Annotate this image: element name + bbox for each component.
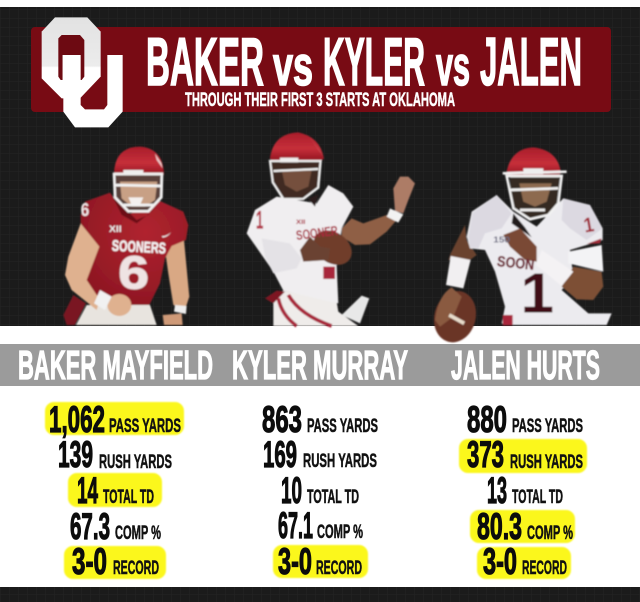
stats: Baker Mayfield: 14	[77, 470, 98, 511]
main title: vs	[436, 34, 470, 97]
stats: Kyler Murray: 3-0	[278, 541, 312, 582]
main title: KYLER	[323, 24, 425, 100]
dark header panel	[0, 7, 640, 326]
main title	[146, 24, 582, 100]
icon: OU logo	[42, 17, 123, 127]
stats: Jalen Hurts: 80.3	[477, 506, 522, 547]
stats: Baker Mayfield: RECORD	[113, 558, 159, 579]
player: Kyler Murray: XII	[296, 219, 305, 226]
stats: Jalen Hurts: PASS YARDS	[512, 416, 583, 437]
name: Baker Mayfield: BAKER MAYFIELD	[18, 342, 213, 388]
player: Baker Mayfield	[63, 147, 189, 325]
player: Jalen Hurts: SOON	[496, 254, 535, 274]
stats: Jalen Hurts: RUSH YARDS	[510, 452, 583, 473]
stats: Jalen Hurts: COMP %	[527, 523, 573, 544]
player: Baker Mayfield: XII	[109, 224, 122, 234]
stats: Kyler Murray: PASS YARDS	[307, 416, 378, 437]
stats: Jalen Hurts: 373	[467, 434, 504, 475]
title banner	[31, 27, 611, 112]
player: Kyler Murray: 1	[256, 207, 263, 234]
stats: Baker Mayfield	[45, 399, 184, 582]
stats: Jalen Hurts	[459, 399, 587, 582]
stats: Baker Mayfield: PASS YARDS	[109, 416, 181, 437]
footer band	[0, 587, 640, 602]
stats: Jalen Hurts: 3-0	[483, 541, 517, 582]
stats: Baker Mayfield: 1,062	[49, 399, 105, 440]
player: Jalen Hurts: 1	[521, 263, 554, 326]
stats: Baker Mayfield: 3-0	[72, 541, 107, 582]
stats: Kyler Murray: 67.1	[278, 505, 313, 546]
main title: BAKER	[146, 24, 264, 100]
player: Kyler Murray	[247, 132, 415, 326]
stats: Kyler Murray	[262, 399, 378, 582]
player: Baker Mayfield: SOONERS	[111, 238, 166, 257]
stats: Kyler Murray: RECORD	[316, 558, 362, 579]
stats: Baker Mayfield: 139	[58, 434, 93, 475]
name band	[0, 344, 640, 386]
stats: Baker Mayfield: 67.3	[70, 506, 110, 547]
player: Kyler Murray: SOONER	[295, 223, 339, 243]
stats: Jalen Hurts: RECORD	[522, 558, 567, 579]
stats: Kyler Murray: 10	[281, 470, 302, 511]
subtitle: THROUGH THEIR FIRST 3 STARTS AT OKLAHOMA	[185, 90, 455, 111]
player: Jalen Hurts	[428, 147, 612, 347]
player: Jalen Hurts: 1	[582, 213, 596, 238]
main title: vs	[273, 34, 313, 97]
stats: Kyler Murray: 863	[262, 399, 302, 440]
stats: Kyler Murray: 169	[263, 434, 297, 475]
player: Baker Mayfield: 6	[118, 247, 149, 299]
stats: Jalen Hurts: 880	[467, 399, 507, 440]
stats: Jalen Hurts: 13	[487, 470, 507, 511]
stats: Kyler Murray: TOTAL TD	[307, 487, 359, 508]
stats: Baker Mayfield: TOTAL TD	[103, 487, 154, 508]
stats: Kyler Murray: RUSH YARDS	[303, 451, 377, 472]
stats: Baker Mayfield: RUSH YARDS	[99, 452, 172, 473]
stats: Jalen Hurts: TOTAL TD	[512, 487, 563, 508]
player: Baker Mayfield: 6	[81, 199, 89, 220]
stats: Baker Mayfield: COMP %	[115, 523, 161, 544]
player: Jalen Hurts: 150	[493, 235, 510, 245]
stats: Kyler Murray: COMP %	[317, 522, 363, 543]
name: Kyler Murray: KYLER MURRAY	[232, 342, 408, 388]
